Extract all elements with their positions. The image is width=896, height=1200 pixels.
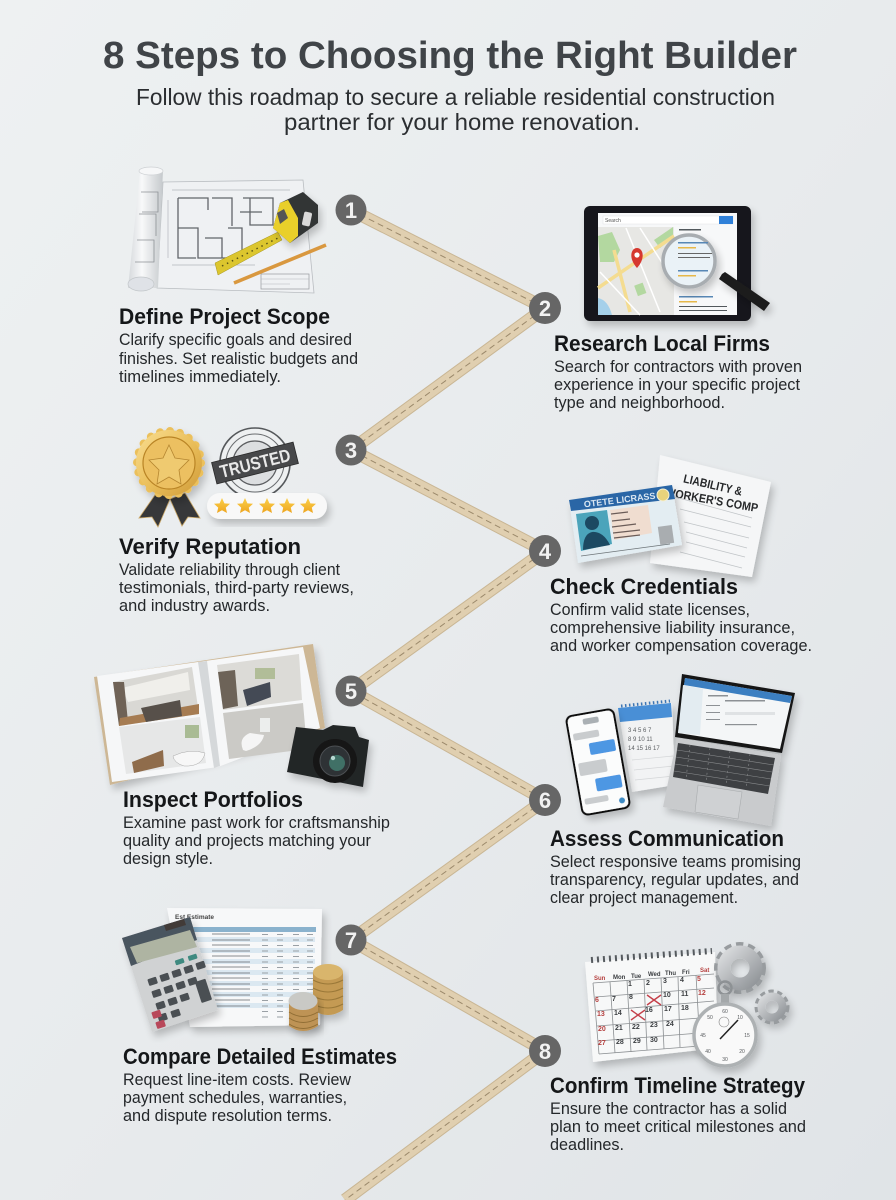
description: Ensure the contractor has a solid xyxy=(550,1100,787,1118)
icon: estimate sheet, calculator and coins: Est Estimate xyxy=(175,914,214,921)
icon: license card and insurance document: LIABILITY & xyxy=(682,472,744,499)
icon: calendar, gears and stopwatch: 30 xyxy=(722,1057,728,1063)
heading: Verify Reputation xyxy=(119,534,301,559)
heading: Confirm Timeline Strategy xyxy=(550,1073,806,1098)
description: testimonials, third-party reviews, xyxy=(119,579,354,597)
icon: calendar, gears and stopwatch: 27 xyxy=(598,1040,606,1047)
description: Clarify specific goals and desired xyxy=(119,331,352,349)
description: Request line-item costs. Review xyxy=(123,1071,351,1089)
description: experience in your specific project xyxy=(554,376,800,394)
icon: calendar, gears and stopwatch: 11 xyxy=(681,991,689,998)
description: clear project management. xyxy=(550,889,738,907)
description xyxy=(550,601,812,655)
description: plan to meet critical milestones and xyxy=(550,1118,806,1136)
icon: calendar, gears and stopwatch: 15 xyxy=(744,1033,750,1039)
step 3 number marker xyxy=(336,434,366,466)
description: transparency, regular updates, and xyxy=(550,871,799,889)
panel: step 7 compare detailed estimates xyxy=(122,908,397,1125)
description: Select responsive teams promising xyxy=(550,853,801,871)
icon: calendar, gears and stopwatch: 22 xyxy=(632,1024,640,1031)
step 6 number marker xyxy=(529,784,561,816)
icon: license card and insurance document xyxy=(569,455,771,577)
icon: calendar, gears and stopwatch: 30 xyxy=(650,1037,658,1044)
description: deadlines. xyxy=(550,1136,624,1154)
subtitle: Follow this roadmap to secure a reliable residential construction xyxy=(136,84,775,110)
icon: calendar, gears and stopwatch: Fri xyxy=(682,970,690,976)
icon: calendar, gears and stopwatch: 40 xyxy=(705,1049,711,1055)
step 4 number marker: 4 xyxy=(539,539,552,564)
panel: step 1 define project scope xyxy=(119,167,358,386)
icon: license card and insurance document: WORKER'S COMP xyxy=(664,485,759,515)
icon: calendar, gears and stopwatch: 5 xyxy=(697,976,701,983)
icon: calendar, gears and stopwatch: 21 xyxy=(615,1025,623,1032)
icon: calendar, gears and stopwatch: 7 xyxy=(612,996,616,1003)
description: and dispute resolution terms. xyxy=(123,1107,332,1125)
icon: calendar, gears and stopwatch: 10 xyxy=(663,992,671,999)
icon: gold medal, trusted stamp and star rating: TRUSTED xyxy=(218,445,292,482)
subtitle xyxy=(136,84,775,135)
icon: license card and insurance document: OTETE LICRASS xyxy=(583,491,656,509)
icon: calendar, gears and stopwatch: 12 xyxy=(698,990,706,997)
icon: phone, calendar and laptop: 3 4 5 6 7 xyxy=(628,728,652,734)
description xyxy=(123,814,390,868)
panel: step 3 verify reputation xyxy=(119,428,354,615)
winding road path xyxy=(345,210,545,1200)
description: Examine past work for craftsmanship xyxy=(123,814,390,832)
icon: calendar, gears and stopwatch: 29 xyxy=(633,1038,641,1045)
icon: calendar, gears and stopwatch: 50 xyxy=(707,1015,713,1021)
icon: calendar, gears and stopwatch: Tue xyxy=(631,974,642,980)
description: Search for contractors with proven xyxy=(554,358,802,376)
icon: calendar, gears and stopwatch: 16 xyxy=(645,1007,653,1014)
description: Validate reliability through client xyxy=(119,561,340,579)
step 7 number marker: 7 xyxy=(345,928,357,953)
icon: estimate sheet, calculator and coins xyxy=(122,908,343,1032)
icon: calendar, gears and stopwatch: Sun xyxy=(594,976,606,982)
icon: calendar, gears and stopwatch xyxy=(585,945,787,1066)
icon: calendar, gears and stopwatch: Wed xyxy=(648,972,661,978)
icon: tablet with map and magnifier xyxy=(584,206,770,321)
icon: calendar, gears and stopwatch: 13 xyxy=(597,1011,605,1018)
description: comprehensive liability insurance, xyxy=(550,619,795,637)
icon: calendar, gears and stopwatch: 28 xyxy=(616,1039,624,1046)
icon: calendar, gears and stopwatch: 6 xyxy=(595,997,599,1004)
icon: calendar, gears and stopwatch: 45 xyxy=(700,1033,706,1039)
step 5 number marker: 5 xyxy=(345,679,357,704)
icon: calendar, gears and stopwatch: 2 xyxy=(646,980,650,987)
description xyxy=(119,561,354,615)
icon: calendar, gears and stopwatch: 20 xyxy=(739,1049,745,1055)
description: payment schedules, warranties, xyxy=(123,1089,347,1107)
icon: calendar, gears and stopwatch: 18 xyxy=(681,1005,689,1012)
icon: calendar, gears and stopwatch: 8 xyxy=(629,994,633,1001)
icon: gold medal, trusted stamp and star rating xyxy=(136,428,327,527)
step 5 number marker xyxy=(336,676,366,706)
step 1 number marker: 1 xyxy=(345,198,357,223)
icon: calendar, gears and stopwatch: 3 xyxy=(663,978,667,985)
description: quality and projects matching your xyxy=(123,832,371,850)
icon: tablet with map and magnifier: Search xyxy=(605,218,621,224)
step 8 number marker: 8 xyxy=(539,1039,551,1064)
heading: Research Local Firms xyxy=(554,331,770,356)
description: timelines immediately. xyxy=(119,368,281,386)
description: finishes. Set realistic budgets and xyxy=(119,350,358,368)
step 6 number marker: 6 xyxy=(539,788,551,813)
subtitle: partner for your home renovation. xyxy=(284,109,640,135)
step 8 number marker xyxy=(529,1035,561,1067)
icon: calendar, gears and stopwatch: 20 xyxy=(598,1026,606,1033)
description: and industry awards. xyxy=(119,597,270,615)
icon: calendar, gears and stopwatch: 1 xyxy=(628,981,632,988)
icon: calendar, gears and stopwatch: 24 xyxy=(666,1021,674,1028)
step 4 number marker xyxy=(529,535,561,567)
heading: Define Project Scope xyxy=(119,304,330,329)
description xyxy=(554,358,802,412)
description xyxy=(123,1071,351,1125)
description: and worker compensation coverage. xyxy=(550,637,812,655)
icon: blueprint, tape measure and pencil xyxy=(128,167,326,293)
panel: step 4 check credentials xyxy=(550,455,812,655)
heading: Inspect Portfolios xyxy=(123,787,303,812)
step 7 number marker xyxy=(336,924,366,956)
description xyxy=(550,1100,806,1154)
heading: Compare Detailed Estimates xyxy=(123,1044,397,1069)
icon: phone, calendar and laptop: 8 9 10 11 xyxy=(628,737,653,743)
step 2 number marker: 2 xyxy=(539,296,551,321)
icon: phone, calendar and laptop xyxy=(565,674,795,826)
description: Confirm valid state licenses, xyxy=(550,601,750,619)
step 3 number marker: 3 xyxy=(345,438,357,463)
description xyxy=(550,853,801,907)
description: design style. xyxy=(123,850,213,868)
icon: open portfolio book and camera xyxy=(94,644,369,787)
icon: calendar, gears and stopwatch: 17 xyxy=(664,1006,672,1013)
icon: calendar, gears and stopwatch: 23 xyxy=(650,1022,658,1029)
icon: calendar, gears and stopwatch: Sat xyxy=(700,968,709,974)
icon: calendar, gears and stopwatch: Mon xyxy=(613,975,626,981)
icon: calendar, gears and stopwatch: 10 xyxy=(737,1015,743,1021)
panel: step 5 inspect portfolios xyxy=(94,644,390,868)
panel: step 2 research local firms xyxy=(554,206,802,412)
title: 8 Steps to Choosing the Right Builder xyxy=(103,35,797,77)
step 2 number marker xyxy=(529,292,561,324)
heading: Assess Communication xyxy=(550,826,784,851)
heading: Check Credentials xyxy=(550,574,738,599)
icon: phone, calendar and laptop: 14 15 16 17 xyxy=(628,746,660,752)
step 1 number marker xyxy=(336,194,366,226)
icon: calendar, gears and stopwatch: 4 xyxy=(680,977,684,984)
icon: calendar, gears and stopwatch: 14 xyxy=(614,1010,622,1017)
panel: step 8 confirm timeline strategy xyxy=(550,945,806,1154)
description xyxy=(119,331,358,386)
description: type and neighborhood. xyxy=(554,394,725,412)
icon: calendar, gears and stopwatch: Thu xyxy=(665,971,676,977)
icon: calendar, gears and stopwatch: 60 xyxy=(722,1009,728,1015)
panel: step 6 assess communication xyxy=(550,674,801,907)
